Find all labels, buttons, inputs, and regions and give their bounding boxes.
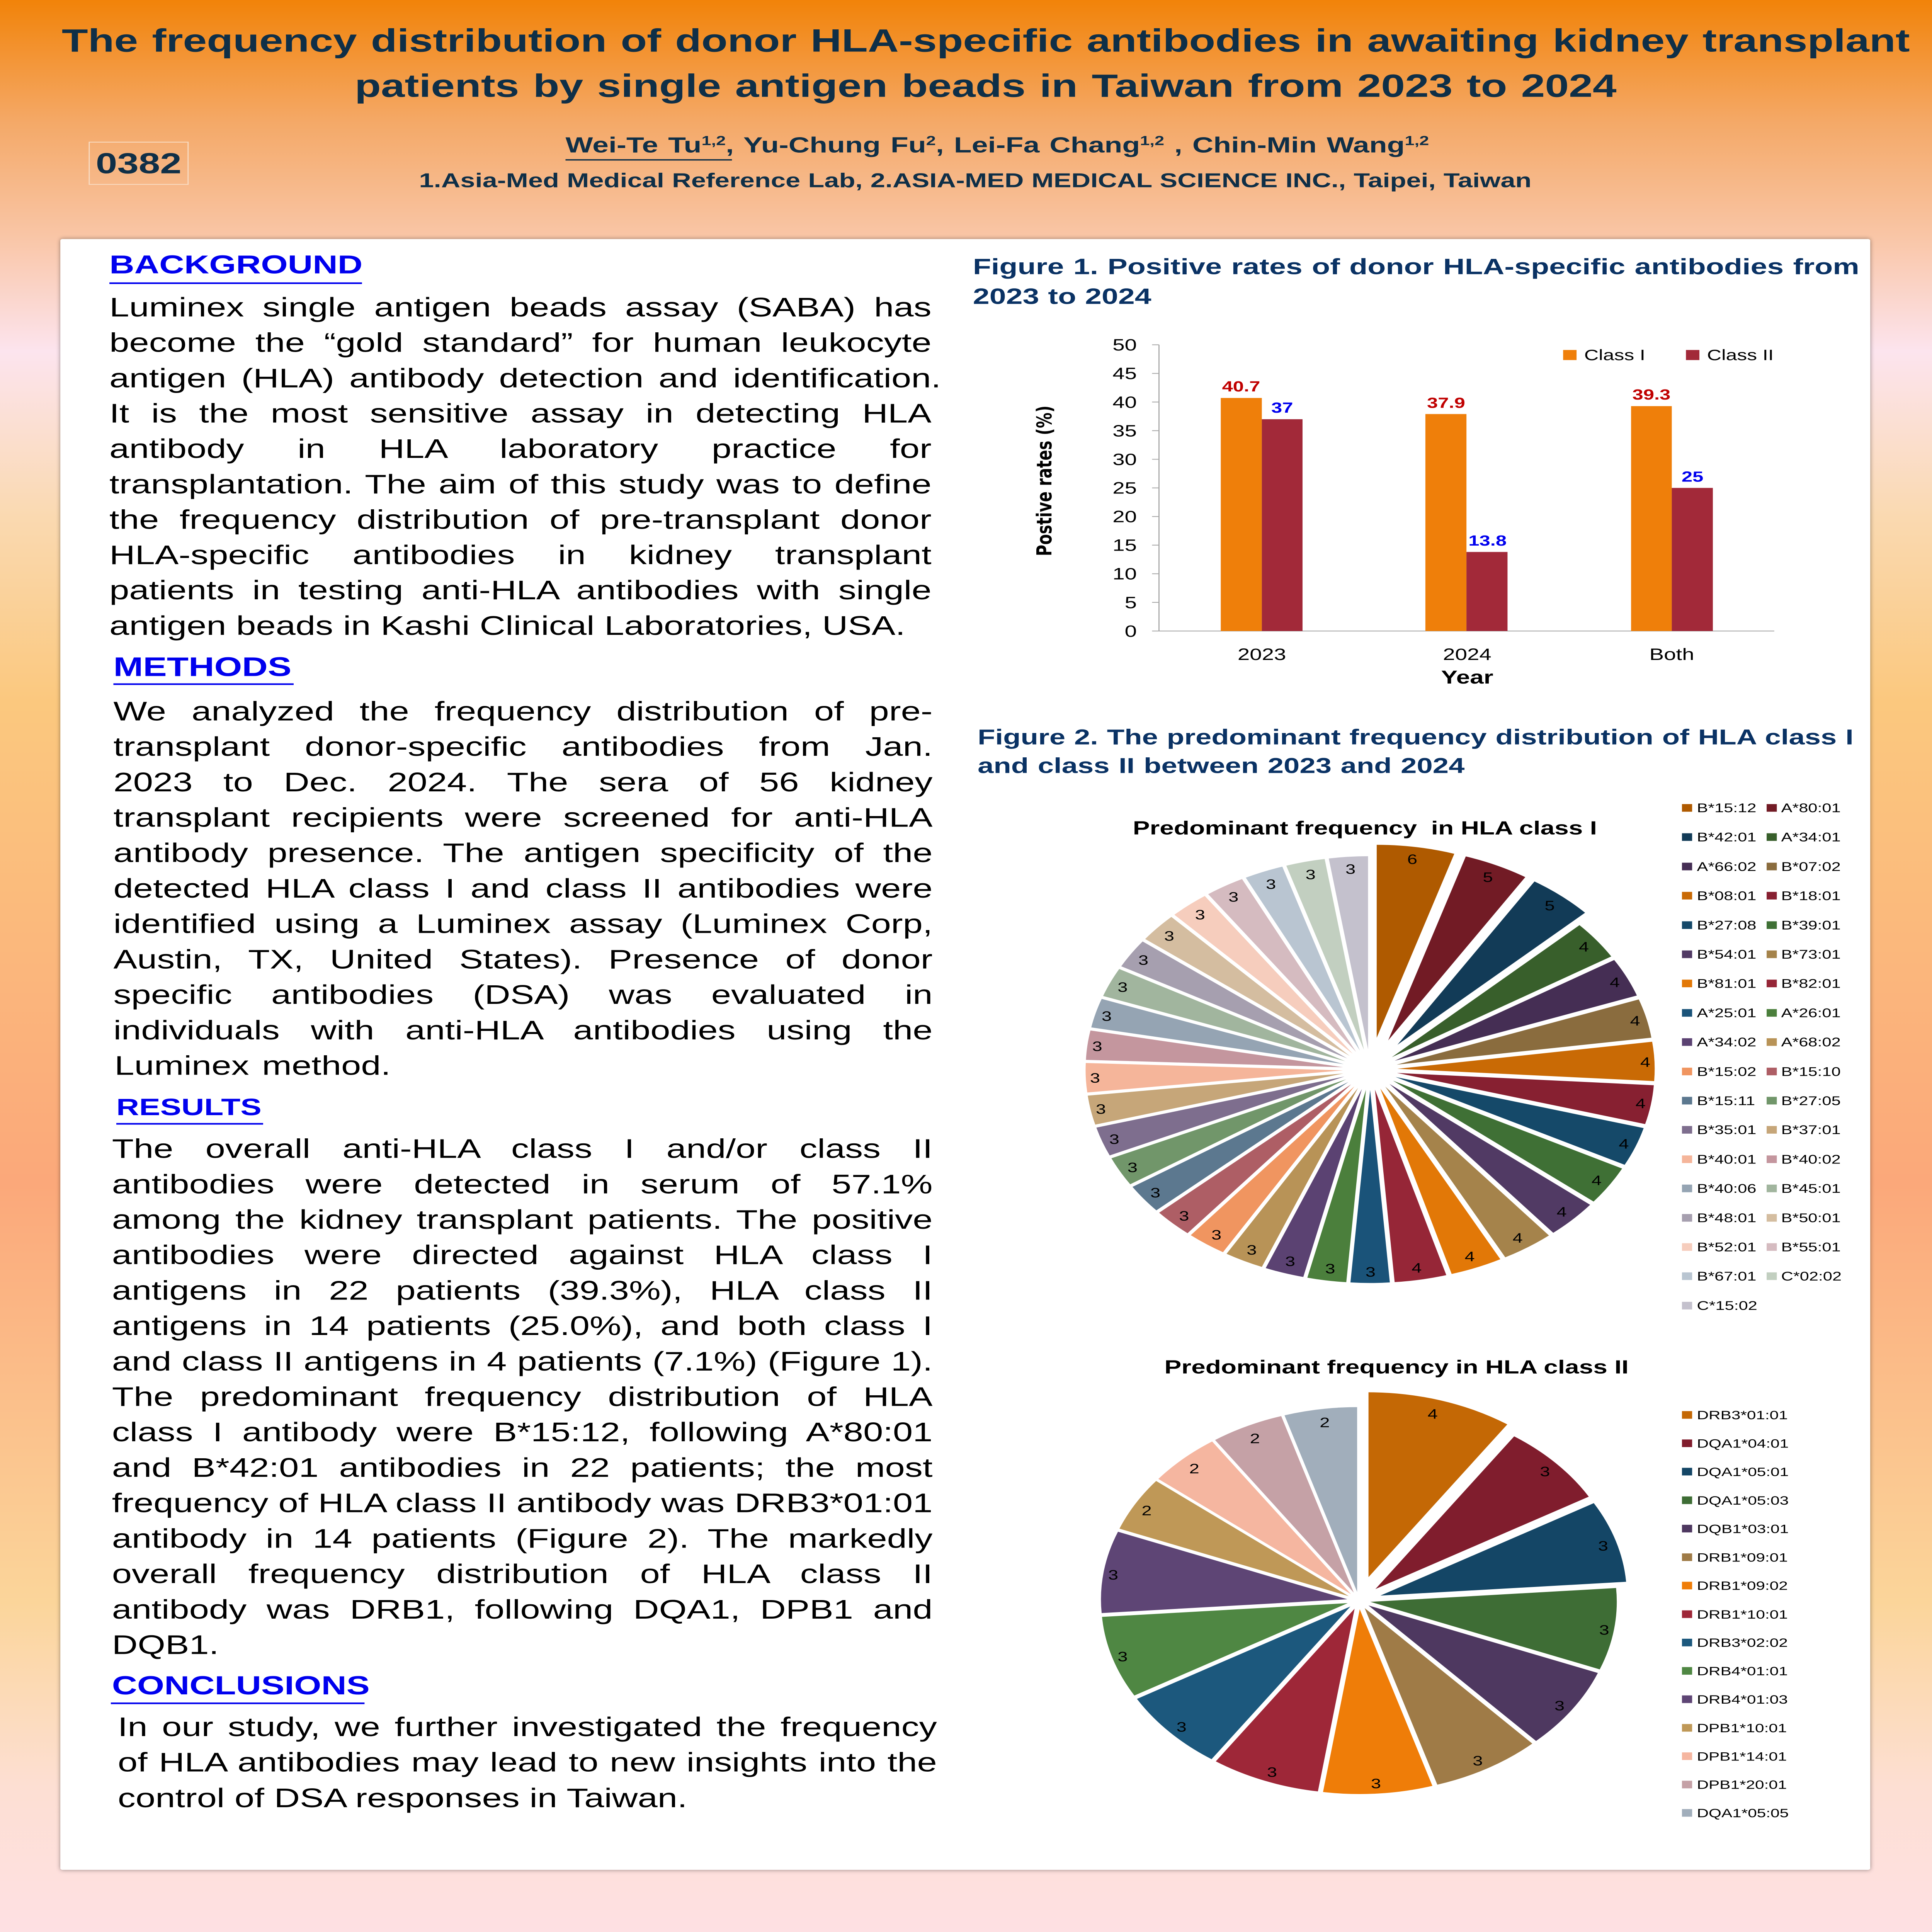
bars: 2023: 37 bbox=[1271, 400, 1293, 416]
heading: figure 2: and class II between 2023 and 2024 bbox=[978, 753, 1464, 778]
pie legend: B*40:02 bbox=[1781, 1152, 1841, 1166]
slice value labels: 3 bbox=[1102, 1009, 1112, 1024]
pie title: Predominant frequency in HLA class I bbox=[1133, 817, 1597, 838]
slice value labels: 3 bbox=[1108, 1567, 1118, 1583]
slice value labels: 3 bbox=[1345, 862, 1355, 877]
y axis: 30 bbox=[1112, 450, 1137, 469]
y axis: 45 bbox=[1112, 364, 1137, 383]
pie legend: DQA1*05:05 bbox=[1697, 1806, 1789, 1820]
text block: results: antibodies were directed against HLA class I bbox=[112, 1240, 932, 1270]
slice value labels: 2 bbox=[1189, 1461, 1199, 1476]
heading: figure 1: Figure 1. Positive rates of donor HLA-specific antibodies from bbox=[973, 254, 1859, 279]
slice value labels: 4 bbox=[1610, 975, 1620, 990]
text block: results: and class II antigens in 4 patients (7.1%) (Figure 1). bbox=[112, 1346, 932, 1376]
slice value labels: 3 bbox=[1179, 1208, 1189, 1224]
slice value labels bbox=[1108, 1406, 1609, 1791]
text block: methods: identified using a Luminex assay (Luminex Corp, bbox=[113, 909, 932, 939]
text block: results: antigens in 22 patients (39.3%), HLA class II bbox=[112, 1276, 932, 1305]
y axis: 50 bbox=[1112, 336, 1137, 354]
text block: methods: Luminex method. bbox=[114, 1051, 391, 1080]
text block: results: antibody was DRB1, following DQA1, DPB1 and bbox=[112, 1594, 932, 1624]
pie legend: DQB1*03:01 bbox=[1697, 1522, 1789, 1536]
text block: background: antigen (HLA) antibody detection and identification. bbox=[109, 363, 941, 393]
authors: Wei-Te Tu1,2, Yu-Chung Fu2, Lei-Fa Chang1,2 , Chin-Min Wang1,2 bbox=[566, 133, 1429, 157]
y axis: 35 bbox=[1112, 422, 1137, 440]
bars: 2024: 37.9 bbox=[1427, 395, 1465, 411]
pie slices bbox=[1095, 1384, 1632, 1797]
pie legend: DRB3*01:01 bbox=[1697, 1408, 1788, 1422]
pie legend: A*66:02 bbox=[1697, 859, 1756, 874]
pie chart: HLA class I bbox=[1076, 799, 1861, 1316]
slice value labels: 3 bbox=[1195, 907, 1205, 922]
text block: results: antibodies were detected in serum of 57.1% bbox=[112, 1169, 932, 1199]
pie legend: B*15:12 bbox=[1697, 801, 1756, 815]
y axis: 25 bbox=[1112, 479, 1137, 497]
slice value labels: 3 bbox=[1177, 1719, 1187, 1735]
y axis: 15 bbox=[1112, 536, 1137, 554]
bars: 2023: 40.7 bbox=[1222, 378, 1260, 395]
pie legend: B*48:01 bbox=[1697, 1211, 1756, 1225]
slice value labels: 3 bbox=[1540, 1464, 1550, 1479]
slice value labels: 4 bbox=[1630, 1013, 1640, 1029]
pie legend: B*50:01 bbox=[1781, 1211, 1841, 1225]
text block: results: and B*42:01 antibodies in 22 patients; the most bbox=[112, 1452, 932, 1483]
text block: results: The predominant frequency distribution of HLA bbox=[112, 1382, 932, 1412]
affiliations: 1.Asia-Med Medical Reference Lab, 2.ASIA-MED MEDICAL SCIENCE INC., Taipei, Taiwan bbox=[419, 170, 1532, 192]
slice value labels: 4 bbox=[1465, 1249, 1475, 1264]
bars: both: 39.3 bbox=[1632, 386, 1670, 403]
heading: methods: METHODS bbox=[113, 652, 291, 682]
text block: methods: Austin, TX, United States). Presence of donor bbox=[113, 944, 932, 974]
pie legend: B*15:11 bbox=[1697, 1094, 1755, 1108]
text block: methods: specific antibodies (DSA) was evaluated in bbox=[113, 980, 932, 1010]
pie legend: DRB1*09:02 bbox=[1697, 1579, 1788, 1593]
slice value labels: 3 bbox=[1267, 1765, 1277, 1780]
slice value labels: 3 bbox=[1371, 1776, 1381, 1791]
text block: methods: transplant recipients were screened for anti-HLA bbox=[113, 803, 932, 832]
slice value labels: 2 bbox=[1250, 1431, 1260, 1446]
pie legend: A*68:02 bbox=[1781, 1035, 1841, 1049]
pie legend: DRB3*02:02 bbox=[1697, 1636, 1788, 1650]
text block: results: among the kidney transplant patients. The positive bbox=[112, 1204, 932, 1235]
x axis labels: 2023 bbox=[1238, 645, 1286, 663]
heading: figure 1: 2023 to 2024 bbox=[973, 284, 1151, 309]
pie legend: DQA1*04:01 bbox=[1697, 1437, 1789, 1451]
y axis bbox=[1112, 336, 1774, 640]
slice value labels: 3 bbox=[1598, 1538, 1608, 1554]
text block: background: HLA-specific antibodies in kidney transplant bbox=[109, 540, 932, 570]
text block: background: It is the most sensitive assay in detecting HLA bbox=[109, 398, 932, 428]
slice value labels: 3 bbox=[1090, 1070, 1100, 1086]
abstract number box: 0382 bbox=[96, 148, 182, 180]
text block: results: antigens in 14 patients (25.0%), and both class I bbox=[112, 1311, 932, 1341]
pie legend: B*39:01 bbox=[1781, 918, 1841, 932]
title: The frequency distribution of donor HLA-specific antibodies in awaiting kidney transplant bbox=[62, 23, 1910, 59]
slice value labels: 4 bbox=[1428, 1406, 1438, 1422]
panel: white content card bbox=[60, 239, 1870, 1870]
chart legend: Class II bbox=[1707, 347, 1774, 363]
pie legend: DPB1*10:01 bbox=[1697, 1721, 1787, 1735]
x axis labels bbox=[1238, 645, 1694, 663]
text block: background: antibody in HLA laboratory practice for bbox=[109, 434, 932, 464]
y axis: 20 bbox=[1112, 507, 1137, 526]
y axis: 40 bbox=[1112, 393, 1137, 411]
pie legend: DPB1*20:01 bbox=[1697, 1778, 1787, 1792]
slice value labels: 4 bbox=[1579, 939, 1589, 954]
heading: background: BACKGROUND bbox=[109, 250, 362, 279]
pie legend: C*02:02 bbox=[1781, 1269, 1842, 1283]
pie legend bbox=[1682, 1408, 1789, 1820]
x axis title: Year bbox=[1441, 667, 1493, 688]
pie legend: DQA1*05:03 bbox=[1697, 1493, 1789, 1507]
text block: methods: 2023 to Dec. 2024. The sera of 56 kidney bbox=[113, 767, 932, 797]
pie legend: B*27:05 bbox=[1781, 1094, 1841, 1108]
pie chart: HLA class II bbox=[1076, 1352, 1861, 1826]
slice value labels: 3 bbox=[1092, 1039, 1102, 1054]
pie legend: B*08:01 bbox=[1697, 889, 1756, 903]
pie legend: A*26:01 bbox=[1781, 1006, 1841, 1020]
pie legend: B*67:01 bbox=[1697, 1269, 1756, 1283]
chart legend bbox=[1563, 347, 1774, 363]
slice value labels bbox=[1090, 852, 1650, 1280]
slice value labels: 3 bbox=[1325, 1261, 1335, 1276]
chart legend: Class I bbox=[1584, 347, 1645, 363]
slice value labels: 3 bbox=[1128, 1160, 1138, 1175]
pie legend: DRB4*01:01 bbox=[1697, 1664, 1788, 1678]
y axis: 5 bbox=[1125, 594, 1137, 612]
slice value labels: 4 bbox=[1412, 1260, 1422, 1276]
heading: results: RESULTS bbox=[116, 1094, 262, 1120]
pie legend: B*18:01 bbox=[1781, 889, 1841, 903]
text block: results: overall frequency distribution of HLA class II bbox=[112, 1559, 932, 1589]
text block: background: Luminex single antigen beads assay (SABA) has bbox=[109, 292, 932, 322]
bars: both bbox=[1631, 386, 1713, 631]
slice value labels: 4 bbox=[1619, 1136, 1629, 1151]
slice value labels: 4 bbox=[1513, 1230, 1523, 1246]
pie legend: DRB4*01:03 bbox=[1697, 1692, 1788, 1706]
text block: results: frequency of HLA class II antibody was DRB3*01:01 bbox=[112, 1488, 932, 1518]
text block: background: patients in testing anti-HLA antibodies with single bbox=[109, 575, 932, 605]
text block: methods: transplant donor-specific antibodies from Jan. bbox=[113, 731, 932, 762]
slice value labels: 3 bbox=[1164, 929, 1174, 944]
x axis labels: Both bbox=[1650, 645, 1694, 663]
pie legend: DPB1*14:01 bbox=[1697, 1749, 1787, 1763]
bar chart: positive rates bbox=[1029, 335, 1784, 690]
pie legend: C*15:02 bbox=[1697, 1299, 1757, 1313]
text block: background: the frequency distribution of pre-transplant donor bbox=[109, 505, 932, 534]
text block: results: The overall anti-HLA class I and/or class II bbox=[112, 1134, 932, 1163]
pie legend: B*54:01 bbox=[1697, 947, 1756, 961]
bars: 2024 bbox=[1425, 395, 1507, 631]
pie legend: A*80:01 bbox=[1781, 801, 1841, 815]
slice value labels: 5 bbox=[1483, 870, 1493, 885]
pie legend: DRB1*09:01 bbox=[1697, 1550, 1788, 1564]
slice value labels: 2 bbox=[1141, 1503, 1152, 1518]
text block: conclusions bbox=[118, 1709, 937, 1815]
y axis: 10 bbox=[1112, 565, 1137, 583]
pie legend bbox=[1682, 801, 1842, 1313]
slice value labels: 4 bbox=[1592, 1173, 1602, 1188]
heading: figure 1 bbox=[973, 252, 1859, 312]
heading: figure 2: Figure 2. The predominant frequency distribution of HLA class I bbox=[978, 725, 1854, 749]
slice value labels: 3 bbox=[1150, 1185, 1160, 1201]
slice value labels: 3 bbox=[1138, 952, 1148, 968]
text block: methods: We analyzed the frequency distribution of pre- bbox=[113, 696, 932, 726]
text block: methods: antibody presence. The antigen specificity of the bbox=[113, 838, 932, 868]
slice value labels: 3 bbox=[1109, 1132, 1119, 1147]
slice value labels: 2 bbox=[1320, 1415, 1330, 1430]
pie legend: B*07:02 bbox=[1781, 859, 1841, 874]
pie legend: B*27:08 bbox=[1697, 918, 1756, 932]
text block: conclusions: In our study, we further investigated the frequency bbox=[118, 1712, 937, 1742]
bars: 2023 bbox=[1221, 378, 1303, 631]
slice value labels: 3 bbox=[1366, 1264, 1376, 1280]
slice value labels: 3 bbox=[1211, 1227, 1221, 1243]
pie legend: B*73:01 bbox=[1781, 947, 1841, 961]
slice value labels: 3 bbox=[1096, 1102, 1106, 1117]
pie legend: B*42:01 bbox=[1697, 830, 1756, 844]
slice value labels: 3 bbox=[1117, 980, 1128, 995]
text block: results: DQB1. bbox=[112, 1630, 219, 1660]
slice value labels: 3 bbox=[1117, 1649, 1128, 1664]
title bbox=[62, 20, 1910, 102]
text block: results: class I antibody were B*15:12, following A*80:01 bbox=[112, 1417, 932, 1447]
pie legend: DQA1*05:01 bbox=[1697, 1465, 1789, 1479]
text block: background: become the “gold standard” for human leukocyte bbox=[109, 328, 932, 358]
text block: conclusions: control of DSA responses in Taiwan. bbox=[118, 1783, 687, 1813]
slice value labels: 3 bbox=[1554, 1698, 1565, 1713]
text block: background: transplantation. The aim of this study was to define bbox=[109, 469, 932, 499]
heading: figure 2 bbox=[978, 722, 1854, 782]
text block: methods: individuals with anti-HLA antibodies using the bbox=[113, 1015, 932, 1045]
slice value labels: 4 bbox=[1636, 1096, 1646, 1111]
slice value labels: 3 bbox=[1306, 867, 1316, 882]
text block: methods bbox=[113, 694, 932, 1083]
pie title: Predominant frequency in HLA class II bbox=[1165, 1356, 1629, 1378]
slice value labels: 3 bbox=[1266, 877, 1276, 892]
slice value labels: 4 bbox=[1640, 1054, 1650, 1070]
pie legend: B*15:02 bbox=[1697, 1065, 1756, 1078]
pie legend: DRB1*10:01 bbox=[1697, 1607, 1788, 1621]
text block: results: antibody in 14 patients (Figure 2). The markedly bbox=[112, 1524, 932, 1553]
pie legend: B*37:01 bbox=[1781, 1123, 1841, 1137]
pie legend: B*81:01 bbox=[1697, 976, 1756, 990]
title: patients by single antigen beads in Taiwan from 2023 to 2024 bbox=[355, 68, 1617, 104]
x axis labels: 2024 bbox=[1443, 645, 1492, 663]
pie legend: A*34:01 bbox=[1781, 830, 1841, 844]
text block: background bbox=[109, 289, 942, 644]
y axis: 0 bbox=[1125, 622, 1137, 640]
text block: conclusions: of HLA antibodies may lead to new insights into the bbox=[118, 1747, 937, 1777]
pie legend: B*40:06 bbox=[1697, 1181, 1756, 1196]
pie legend: A*25:01 bbox=[1697, 1006, 1756, 1020]
slice value labels: 4 bbox=[1556, 1204, 1567, 1219]
slice value labels: 6 bbox=[1407, 852, 1417, 867]
bars: both: 25 bbox=[1682, 469, 1703, 485]
pie legend: B*82:01 bbox=[1781, 976, 1841, 990]
pie legend: B*15:10 bbox=[1781, 1065, 1841, 1078]
slice value labels: 3 bbox=[1473, 1753, 1483, 1769]
pie legend: B*35:01 bbox=[1697, 1123, 1756, 1137]
pie legend: B*52:01 bbox=[1697, 1240, 1756, 1254]
pie legend: B*40:01 bbox=[1697, 1152, 1756, 1166]
slice value labels: 3 bbox=[1599, 1622, 1609, 1638]
slice value labels: 3 bbox=[1228, 889, 1238, 905]
text block: background: antigen beads in Kashi Clinical Laboratories, USA. bbox=[109, 611, 905, 641]
abstract number box bbox=[88, 142, 189, 185]
pie legend: A*34:02 bbox=[1697, 1035, 1756, 1049]
text block: results bbox=[112, 1131, 932, 1662]
pie slices bbox=[1085, 843, 1655, 1283]
pie legend: B*55:01 bbox=[1781, 1240, 1841, 1254]
text block: methods: detected HLA class I and class II antibodies were bbox=[113, 873, 932, 903]
slice value labels: 3 bbox=[1285, 1254, 1295, 1269]
slice value labels: 3 bbox=[1247, 1242, 1257, 1258]
heading: conclusions: CONCLUSIONS bbox=[112, 1671, 370, 1700]
slice value labels: 5 bbox=[1544, 898, 1555, 913]
y axis title: Postive rates (%) bbox=[1032, 405, 1056, 556]
bars: 2024: 13.8 bbox=[1468, 532, 1507, 549]
pie legend: B*45:01 bbox=[1781, 1181, 1841, 1196]
